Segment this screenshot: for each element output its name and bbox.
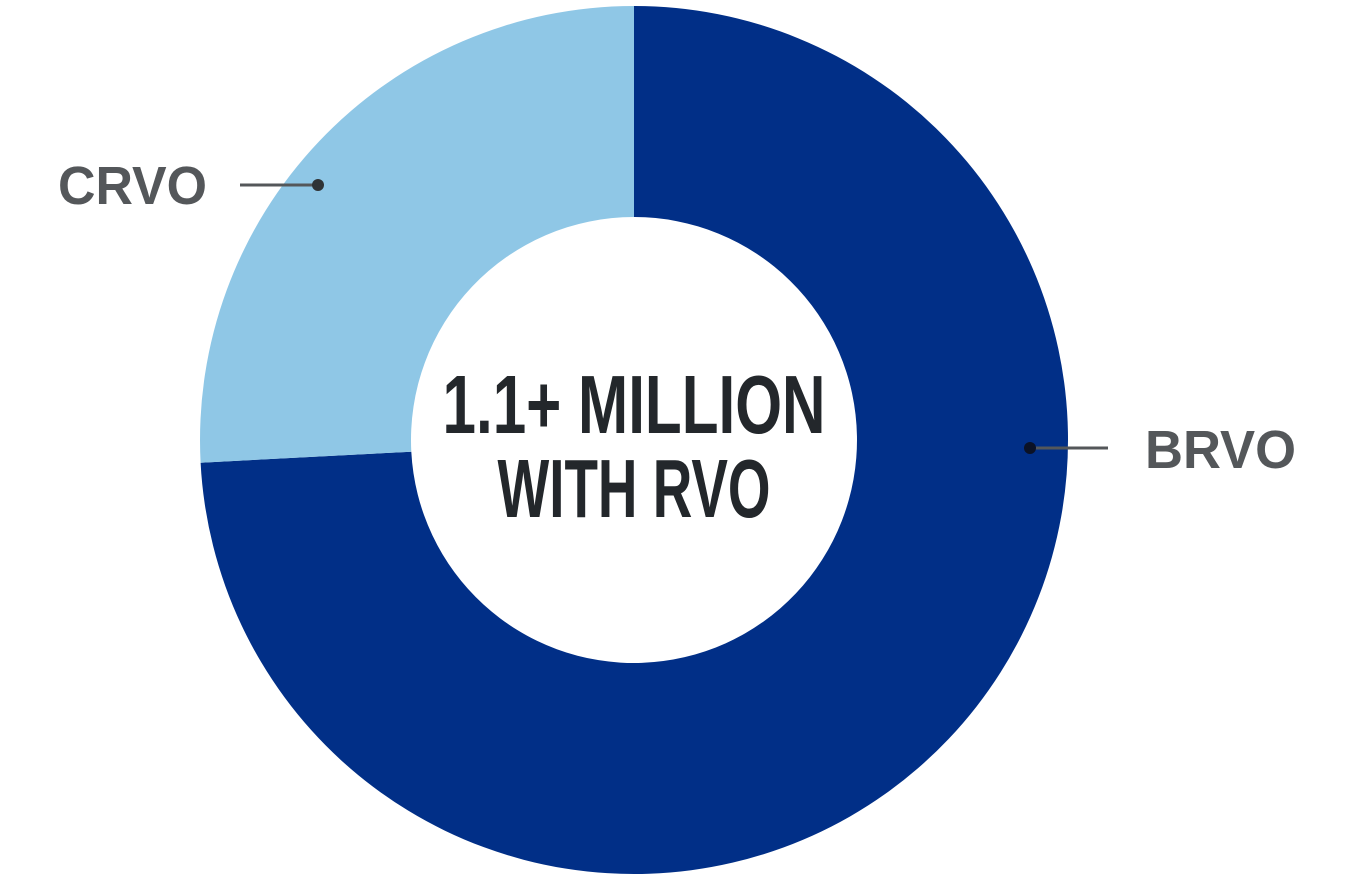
center text: WITH RVO xyxy=(498,442,770,535)
label: BRVO xyxy=(1024,420,1296,480)
center text xyxy=(442,358,826,535)
segment: BRVO xyxy=(201,6,1068,874)
label: BRVO: BRVO xyxy=(1145,420,1296,480)
donut chart xyxy=(200,6,1068,874)
segment: CRVO xyxy=(200,6,634,463)
center text: 1.1+ MILLION xyxy=(442,358,826,451)
label: CRVO xyxy=(58,156,324,216)
label: CRVO: CRVO xyxy=(58,156,207,216)
